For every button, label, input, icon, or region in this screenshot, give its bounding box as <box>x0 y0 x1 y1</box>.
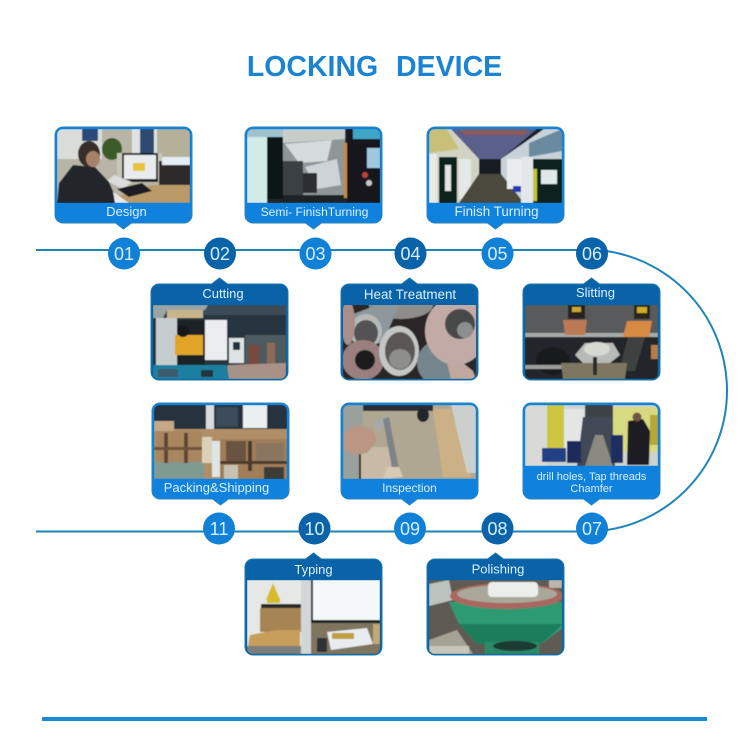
label: Inspection <box>382 481 437 495</box>
title: LOCKING DEVICE <box>247 51 502 83</box>
label: drill holes, Tap threads <box>537 471 647 483</box>
step 09: 09 <box>400 519 420 539</box>
step 03: 03 <box>305 244 326 264</box>
step 08: 08 <box>487 519 508 539</box>
bottom bar <box>42 717 707 721</box>
step 11 <box>203 512 235 544</box>
photo: cutting workshop <box>153 305 286 379</box>
timeline: connecting arc <box>606 251 727 530</box>
label: Heat Treatment <box>364 287 456 302</box>
photo: steel pipes <box>343 305 476 379</box>
step 07 <box>576 512 608 544</box>
card: Polishing <box>427 553 564 655</box>
label: Cutting <box>202 286 244 301</box>
card: Design <box>55 127 192 229</box>
label line 2: Chamfer <box>570 483 613 495</box>
step 10 <box>298 512 330 544</box>
photo: caliper inspection <box>343 405 476 479</box>
step 04: 04 <box>400 244 421 264</box>
card: Packing & Shipping <box>152 403 289 505</box>
label: Design <box>106 204 147 219</box>
step 02: 02 <box>210 244 230 264</box>
label: Slitting <box>576 285 615 300</box>
step 07: 07 <box>582 519 602 539</box>
card: Semi-Finish Turning <box>245 127 382 229</box>
step 02 <box>204 238 236 270</box>
step 11: 11 <box>210 519 228 539</box>
step 09 <box>394 512 426 544</box>
photo: drilling workshop <box>525 405 658 466</box>
step 04 <box>394 238 426 270</box>
timeline: lower line <box>36 530 607 532</box>
label: Typing <box>294 562 333 577</box>
photo: CNC lathe <box>247 129 380 203</box>
label: Polishing <box>472 562 524 576</box>
label: Semi- FinishTurning <box>261 205 368 219</box>
photo: vibratory polisher <box>429 580 564 654</box>
step 06: 06 <box>582 244 602 264</box>
card: Slitting <box>523 278 660 380</box>
label: Finish Turning <box>454 204 539 219</box>
step 01: 01 <box>114 244 134 264</box>
photo: designer at computer <box>57 129 190 203</box>
card: Typing <box>245 553 382 655</box>
photo: turning workshop corridor <box>429 129 562 203</box>
card: Heat Treatment <box>341 278 487 385</box>
timeline: upper line <box>36 249 607 251</box>
step 08 <box>482 512 514 544</box>
card: drill holes, Tap threads, Chamfer <box>523 403 660 505</box>
step 01 <box>108 238 140 270</box>
card: Inspection <box>341 403 478 505</box>
step 10: 10 <box>304 519 325 539</box>
step 06 <box>576 238 608 270</box>
photo: laser marking <box>247 580 380 654</box>
label: Packing&Shipping <box>164 480 269 495</box>
step 05 <box>482 238 514 270</box>
step 03 <box>300 238 332 270</box>
photo: slitting machine <box>525 305 658 379</box>
step 05: 05 <box>487 244 508 264</box>
card: Finish Turning <box>427 127 564 229</box>
photo: crates in warehouse <box>154 405 287 479</box>
card: Cutting <box>151 278 288 380</box>
